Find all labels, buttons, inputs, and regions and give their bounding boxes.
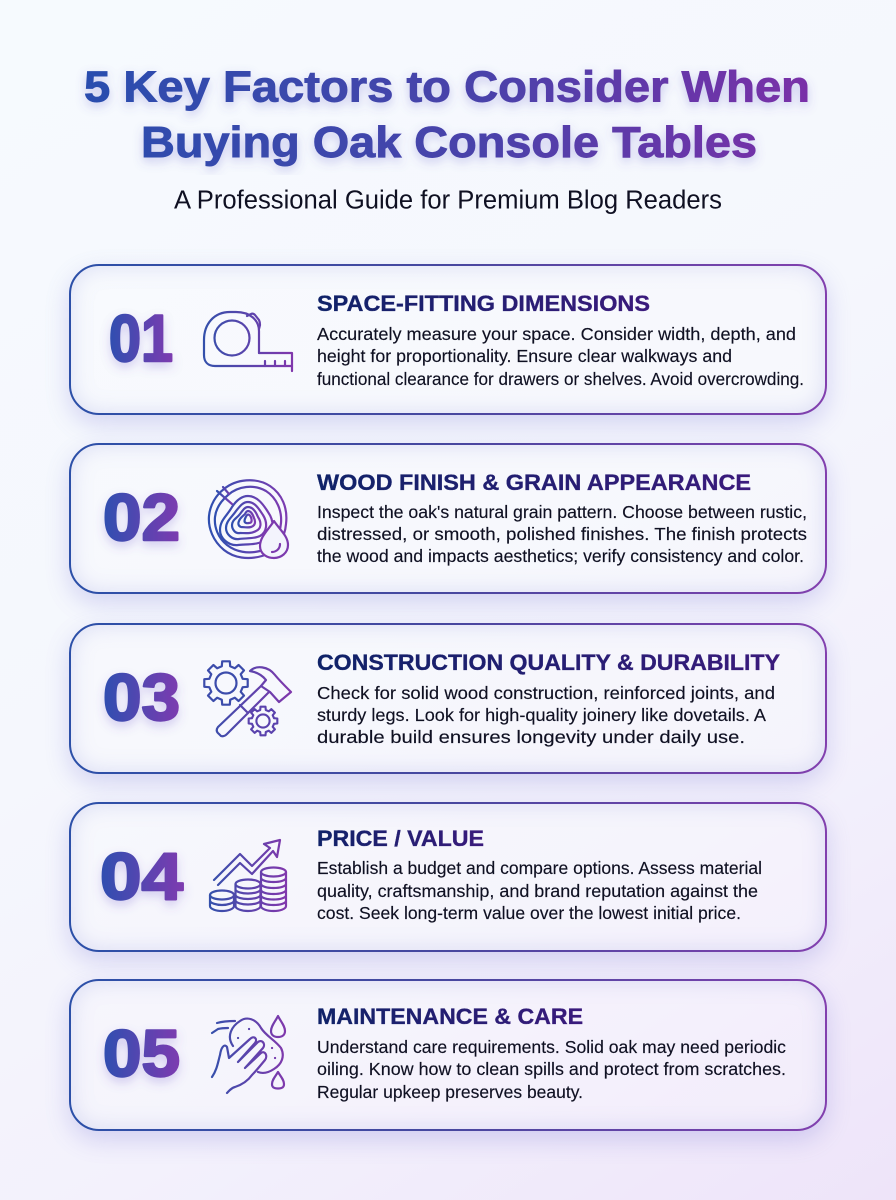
heading: PRICE / VALUE bbox=[317, 826, 484, 851]
title: Buying Oak Console Tables bbox=[141, 118, 757, 167]
description: Establish a budget and compare options. Assess material bbox=[317, 858, 762, 878]
panel: price and value bbox=[69, 802, 827, 952]
heading: MAINTENANCE & CARE bbox=[317, 1004, 583, 1029]
icon: coin stacks and arrow bbox=[210, 840, 286, 911]
description: Regular upkeep preserves beauty. bbox=[317, 1082, 583, 1102]
icon: gears and hammer bbox=[204, 661, 291, 736]
description: Check for solid wood construction, reinforced joints, and bbox=[317, 683, 775, 703]
icon: tape measure bbox=[204, 312, 292, 371]
title: 5 Key Factors to Consider When bbox=[84, 62, 810, 112]
description: the wood and impacts aesthetics; verify consistency and color. bbox=[317, 546, 804, 566]
description: cost. Seek long-term value over the lowest initial price. bbox=[317, 903, 741, 923]
heading: WOOD FINISH & GRAIN APPEARANCE bbox=[317, 470, 751, 495]
icon: hand, sponge and drops bbox=[212, 1016, 285, 1093]
description: Understand care requirements. Solid oak may need periodic bbox=[317, 1037, 786, 1057]
heading: CONSTRUCTION QUALITY & DURABILITY bbox=[317, 650, 780, 675]
description: functional clearance for drawers or shelves. Avoid overcrowding. bbox=[317, 369, 804, 389]
description: Inspect the oak's natural grain pattern. Choose between rustic, bbox=[317, 502, 807, 522]
number 04: 04 bbox=[100, 839, 183, 913]
description bbox=[317, 683, 775, 747]
panel: maintenance and care bbox=[69, 979, 827, 1131]
number 01: 01 bbox=[109, 301, 173, 375]
description: height for proportionality. Ensure clear walkways and bbox=[317, 346, 732, 366]
description: distressed, or smooth, polished finishes. The finish protects bbox=[317, 524, 807, 544]
description bbox=[317, 858, 762, 923]
description: durable build ensures longevity under daily use. bbox=[317, 727, 745, 747]
number 03: 03 bbox=[103, 660, 180, 734]
subtitle: A Professional Guide for Premium Blog Readers bbox=[174, 186, 722, 214]
description bbox=[317, 324, 804, 389]
description bbox=[317, 1037, 786, 1102]
panel: space-fitting dimensions bbox=[69, 264, 827, 415]
description bbox=[317, 502, 807, 566]
title bbox=[82, 62, 812, 174]
number 05: 05 bbox=[103, 1016, 180, 1090]
description: sturdy legs. Look for high-quality joinery like dovetails. A bbox=[317, 705, 766, 725]
icon: wood rings and drop bbox=[209, 480, 288, 558]
heading: SPACE-FITTING DIMENSIONS bbox=[317, 291, 650, 316]
number 02: 02 bbox=[103, 480, 180, 554]
panel: construction quality bbox=[69, 623, 827, 774]
panel: wood finish and grain bbox=[69, 443, 827, 594]
description: Accurately measure your space. Consider width, depth, and bbox=[317, 324, 796, 344]
description: oiling. Know how to clean spills and protect from scratches. bbox=[317, 1059, 786, 1079]
description: quality, craftsmanship, and brand reputation against the bbox=[317, 881, 758, 901]
